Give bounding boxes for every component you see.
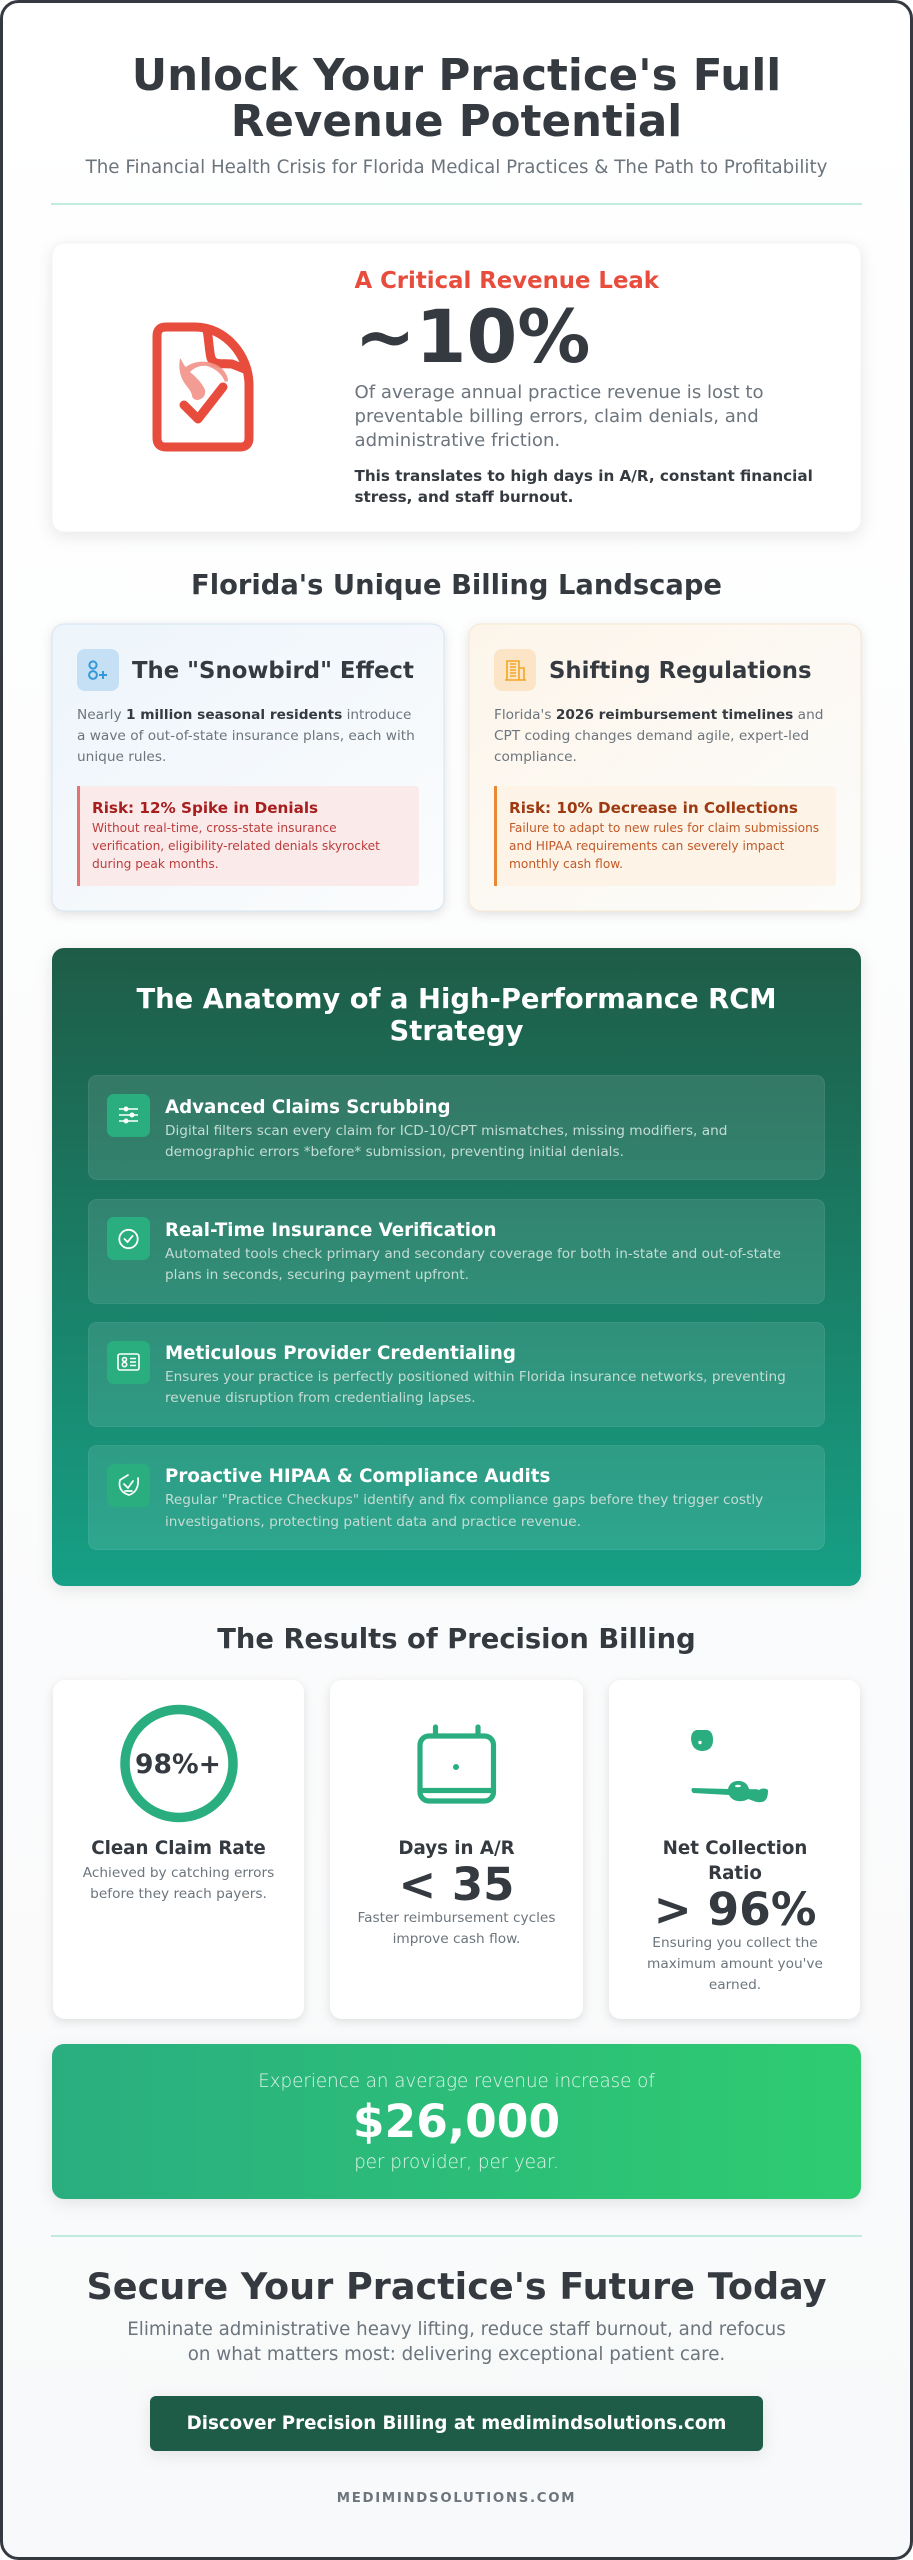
- stat card: clean claim rate: [53, 1680, 304, 2019]
- heading: RCM strategy: The Anatomy of a High-Performance RCM: [136, 984, 777, 1015]
- stat card: net collection ratio: [609, 1680, 860, 2019]
- item: insurance verification: plans in seconds, securing payment upfront.: [165, 1267, 469, 1283]
- text: regulations: compliance.: [494, 749, 577, 765]
- stat card: net collection ratio: maximum amount you've: [647, 1956, 823, 1972]
- stat card: days in A/R: improve cash flow.: [393, 1931, 520, 1947]
- icon: shield check: [107, 1464, 150, 1507]
- stat card: net collection ratio: earned.: [709, 1977, 761, 1993]
- header: [85, 51, 828, 178]
- banner: revenue increase: per provider, per year.: [354, 2152, 559, 2173]
- callout: denial risk: during peak months.: [92, 857, 219, 871]
- title: Revenue Potential: [231, 97, 682, 147]
- callout: collection risk: [494, 786, 836, 886]
- panel: critical revenue leak: [52, 243, 861, 532]
- text: CTA: Eliminate administrative heavy lifting, reduce staff burnout, and refocus: [127, 2319, 786, 2340]
- callout: denial risk: Risk: 12% Spike in Denials: [92, 799, 318, 817]
- chart: ring: 98%+: [135, 1749, 221, 1780]
- item: provider credentialing: [88, 1322, 824, 1426]
- call to action: [86, 2265, 827, 2451]
- footer: MEDIMINDSOLUTIONS.COM: [337, 2491, 576, 2506]
- text: CTA: on what matters most: delivering exceptional patient care.: [188, 2344, 725, 2365]
- subtitle: The Financial Health Crisis for Florida Medical Practices & The Path to Profitability: [85, 157, 828, 178]
- item: compliance audits: [88, 1446, 824, 1550]
- stat card: net collection ratio: > 96%: [654, 1883, 816, 1936]
- heading: RCM strategy: Strategy: [390, 1016, 524, 1047]
- icon: building: [494, 649, 536, 691]
- callout: collection risk: Failure to adapt to new rules for claim submissions: [509, 821, 819, 835]
- text: critical leak: This translates to high days in A/R, constant financial: [354, 467, 813, 485]
- text: snowbird: a wave of out-of-state insurance plans, each with: [77, 728, 415, 744]
- icon: calendar: [420, 1727, 494, 1801]
- panel: snowbird effect: [52, 624, 444, 911]
- icon: check circle: [107, 1217, 150, 1260]
- banner: revenue increase: [52, 2044, 861, 2199]
- callout: denial risk: verification, eligibility-related denials skyrocket: [92, 839, 380, 853]
- stat card: clean claim rate: Clean Claim Rate: [91, 1838, 266, 1859]
- item: provider credentialing: revenue disruption from credentialing lapses.: [165, 1390, 476, 1406]
- icon: snowbird users: [77, 649, 119, 691]
- banner: revenue increase: Experience an average revenue increase of: [258, 2071, 655, 2092]
- item: compliance audits: Regular "Practice Checkups" identify and fix compliance gaps before they trigger costly: [165, 1492, 763, 1508]
- icon: document with check: [157, 327, 249, 447]
- stat card: days in A/R: [330, 1680, 583, 2019]
- item: claims scrubbing: Advanced Claims Scrubbing: [165, 1097, 451, 1118]
- text: critical leak: Of average annual practice revenue is lost to: [354, 382, 764, 403]
- callout: denial risk: [77, 786, 419, 886]
- title: Unlock Your Practice's Full: [132, 51, 781, 101]
- button: Discover Precision Billing at medimindsolutions.com: [187, 2413, 726, 2434]
- text: critical leak: administrative friction.: [354, 430, 560, 451]
- icon: ID card: [107, 1341, 150, 1384]
- text: critical leak: ~10%: [354, 295, 590, 380]
- text: snowbird: unique rules.: [77, 749, 166, 765]
- item: insurance verification: Real-Time Insurance Verification: [165, 1220, 496, 1241]
- heading: snowbird: The "Snowbird" Effect: [132, 658, 414, 684]
- text: regulations: Florida's 2026 reimbursement timelines and: [494, 707, 823, 723]
- item: claims scrubbing: Digital filters scan every claim for ICD-10/CPT mismatches, missing modifiers, and: [165, 1123, 727, 1139]
- text: critical leak: A Critical Revenue Leak: [354, 268, 660, 294]
- icon: sliders: [107, 1094, 150, 1137]
- item: compliance audits: Proactive HIPAA & Compliance Audits: [165, 1466, 550, 1487]
- heading: billing landscape: Florida's Unique Billing Landscape: [191, 570, 722, 601]
- stat card: clean claim rate: before they reach payers.: [90, 1886, 267, 1902]
- item: claims scrubbing: [88, 1076, 824, 1180]
- text: critical leak: stress, and staff burnout.: [354, 488, 573, 506]
- stat card: net collection ratio: Ensuring you collect the: [652, 1935, 818, 1951]
- callout: collection risk: monthly cash flow.: [509, 857, 623, 871]
- icon: broken coin: [691, 1730, 768, 1802]
- callout: collection risk: Risk: 10% Decrease in Collections: [509, 799, 798, 817]
- stat card: clean claim rate: Achieved by catching errors: [83, 1865, 274, 1881]
- button: [150, 2396, 763, 2451]
- stat card: days in A/R: Faster reimbursement cycles: [358, 1910, 555, 1926]
- text: critical leak: [354, 268, 813, 506]
- stat card: net collection ratio: Ratio: [708, 1863, 762, 1884]
- panel: RCM strategy: [52, 948, 861, 1586]
- stat card: days in A/R: < 35: [398, 1858, 514, 1911]
- callout: collection risk: and HIPAA requirements can severely impact: [509, 839, 785, 853]
- panel: shifting regulations: [469, 624, 861, 911]
- item: claims scrubbing: demographic errors *before* submission, preventing initial denials.: [165, 1144, 624, 1160]
- banner: revenue increase: $26,000: [353, 2095, 560, 2148]
- item: insurance verification: Automated tools check primary and secondary coverage for both in-state and out-of-state: [165, 1246, 781, 1262]
- heading: regulations: Shifting Regulations: [549, 658, 812, 684]
- text: regulations: CPT coding changes demand agile, expert-led: [494, 728, 809, 744]
- heading: results: The Results of Precision Billing: [217, 1624, 696, 1655]
- item: provider credentialing: Ensures your practice is perfectly positioned within Florida insurance networks, preventing: [165, 1369, 786, 1385]
- chart: ring: [125, 1710, 233, 1818]
- heading: CTA: Secure Your Practice's Future Today: [86, 2265, 827, 2308]
- stat card: net collection ratio: Net Collection: [663, 1838, 807, 1859]
- callout: denial risk: Without real-time, cross-state insurance: [92, 821, 337, 835]
- text: critical leak: preventable billing errors, claim denials, and: [354, 406, 759, 427]
- stat card: days in A/R: Days in A/R: [398, 1838, 515, 1859]
- item: provider credentialing: Meticulous Provider Credentialing: [165, 1343, 516, 1364]
- item: compliance audits: investigations, protecting patient data and practice revenue.: [165, 1514, 581, 1530]
- text: snowbird: Nearly 1 million seasonal residents introduce: [77, 707, 411, 723]
- item: insurance verification: [88, 1200, 824, 1304]
